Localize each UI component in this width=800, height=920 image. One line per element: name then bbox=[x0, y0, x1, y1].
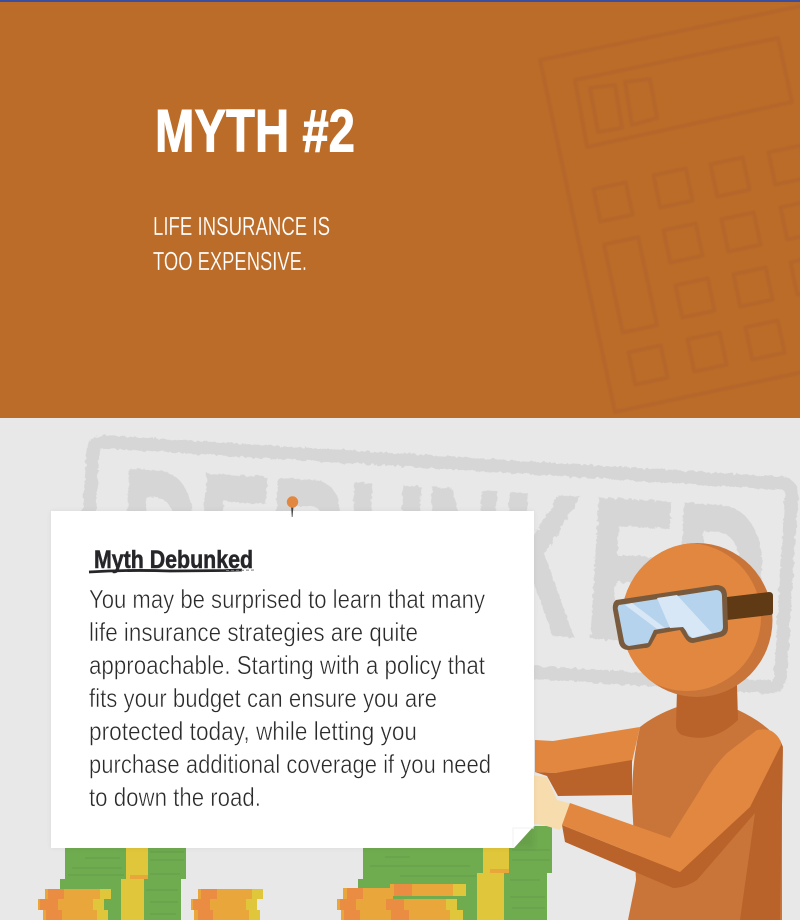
card body text: life insurance strategies are quite bbox=[89, 617, 418, 647]
centre money stack bbox=[337, 826, 552, 920]
card body text: fits your budget can ensure you are bbox=[89, 683, 437, 713]
hand bbox=[530, 775, 572, 830]
front arm bbox=[562, 729, 783, 888]
myth statement bbox=[153, 211, 330, 276]
goggles bbox=[613, 585, 728, 650]
goggle strap bbox=[727, 592, 773, 620]
icon: calculator watermark bbox=[540, 0, 800, 412]
panel: debunked background bbox=[0, 418, 800, 920]
title: MYTH #2 bbox=[155, 98, 355, 164]
rear arm bbox=[535, 727, 640, 796]
neck bbox=[676, 685, 738, 738]
small money pile bbox=[191, 889, 263, 920]
left money stack bbox=[38, 840, 186, 920]
card heading: Myth Debunked bbox=[94, 546, 253, 574]
card body text: You may be surprised to learn that many bbox=[89, 584, 485, 614]
head bbox=[613, 543, 772, 697]
panel: myth debunked card bbox=[51, 511, 534, 848]
icon: push pin bbox=[287, 496, 298, 517]
illustration: stacks of money bbox=[38, 826, 552, 920]
card body text: protected today, while letting you bbox=[89, 716, 417, 746]
illustration: person with goggles bbox=[530, 543, 783, 920]
torso shadow bbox=[740, 747, 783, 920]
myth statement: TOO EXPENSIVE. bbox=[153, 246, 307, 276]
card body text bbox=[89, 584, 491, 812]
myth statement: LIFE INSURANCE IS bbox=[153, 211, 330, 241]
card body text: purchase additional coverage if you need bbox=[89, 749, 491, 779]
panel: myth header bbox=[0, 0, 800, 418]
card body text: to down the road. bbox=[89, 782, 261, 812]
torso bbox=[628, 707, 782, 920]
card body text: approachable. Starting with a policy that bbox=[89, 650, 486, 680]
